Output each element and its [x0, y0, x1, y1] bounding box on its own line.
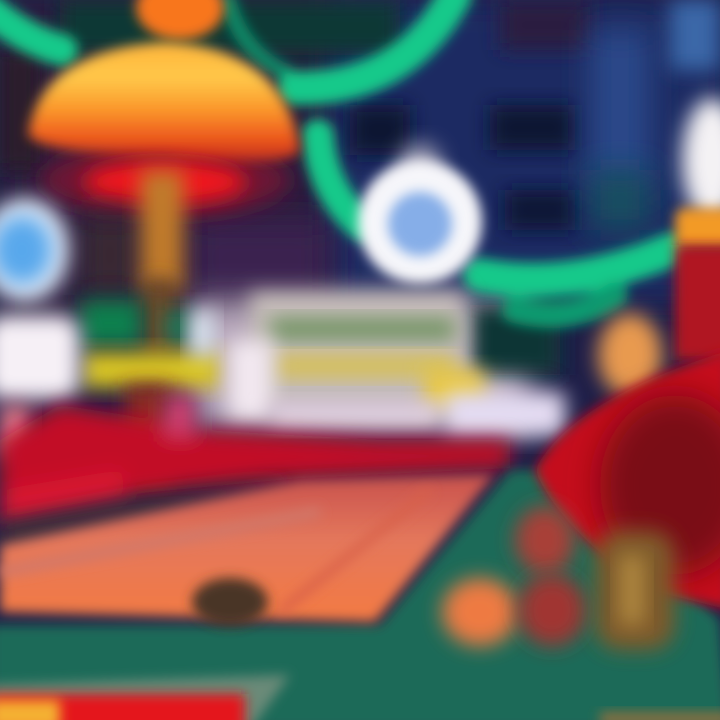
carousel pole: [80, 170, 220, 485]
bottom left red and yellow shape: [0, 675, 290, 720]
small dark object on walkway: [192, 578, 268, 626]
dark edge at floor back: [0, 478, 300, 548]
green arcs: [0, 0, 670, 315]
red band behind floor: [0, 395, 510, 525]
left blue and white shapes: [0, 198, 214, 455]
central sign: [228, 292, 565, 436]
bottom right tan edge: [600, 712, 720, 720]
brown teddy objects: [442, 506, 675, 650]
orange finial: [136, 0, 224, 40]
right red structures: [535, 98, 720, 610]
white circle with blue centre: [358, 143, 482, 284]
carousel canopy dome: [28, 42, 300, 218]
lower backdrop haze: [190, 300, 560, 430]
green floor: [0, 470, 720, 720]
salmon striped walkway: [0, 474, 495, 622]
